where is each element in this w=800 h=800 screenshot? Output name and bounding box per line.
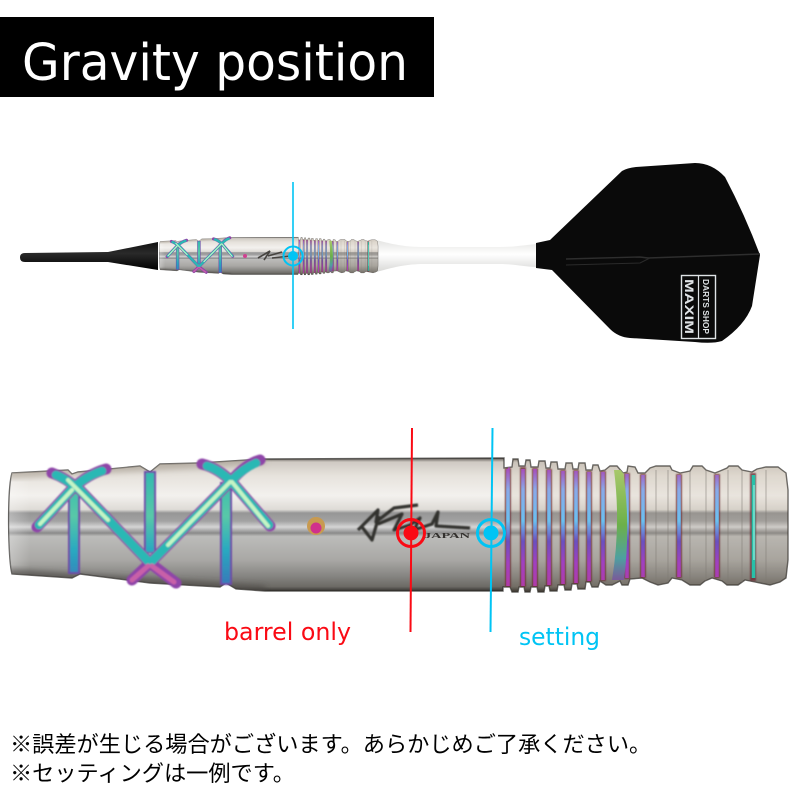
dart shaft [376,240,536,272]
title banner: Gravity position [22,34,408,93]
dart tip [20,242,158,270]
barrel only marker [398,428,424,632]
label: setting: setting [519,623,600,651]
footnote 1: ※誤差が生じる場合がございます。あらかじめご了承ください。 [10,731,651,757]
jewel [307,517,325,535]
jewel [243,254,247,258]
large barrel detail [8,455,794,595]
flight logo: MAXIM [682,279,696,334]
dart barrel [159,236,380,276]
small signature [258,251,290,260]
small gravity marker [284,182,302,329]
flight [536,163,760,343]
small full dart [20,163,760,343]
setting marker [478,428,504,632]
label: barrel only: barrel only [224,618,351,646]
signature logo: JAPAN [424,531,471,540]
flight logo [682,276,716,338]
footnotes [10,731,651,786]
footnote 2: ※セッティングは一例です。 [10,761,295,786]
title banner [0,17,434,97]
signature logo [358,505,471,540]
flight logo: DARTS SHOP [701,279,710,335]
